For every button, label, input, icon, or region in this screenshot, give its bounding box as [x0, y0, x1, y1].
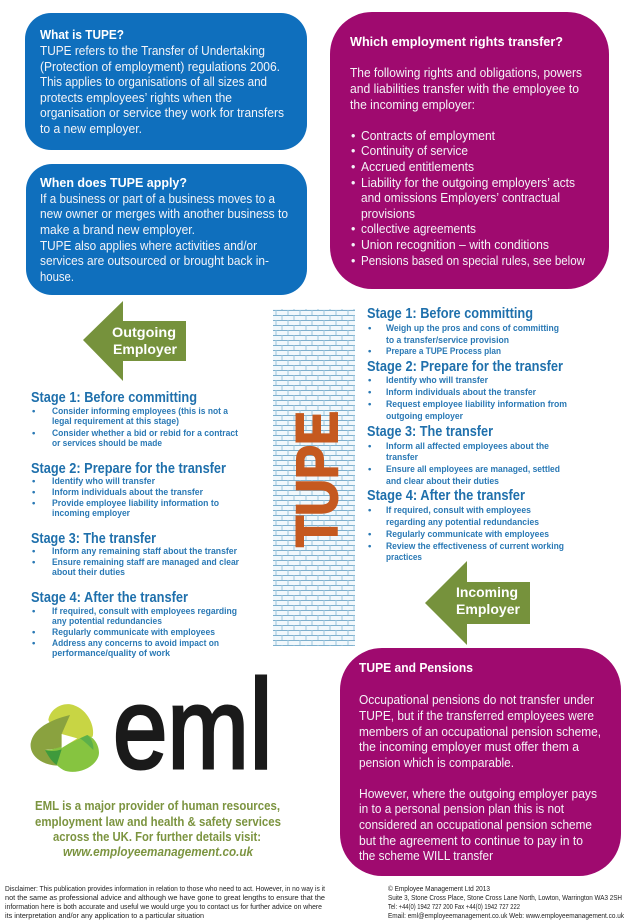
list: rights that transfer [351, 129, 586, 268]
text block: occupational pensions: members of an occupational pension scheme, [359, 725, 601, 739]
stage 4 outgoing: If required, consult with employees regarding [52, 606, 237, 617]
text block: contact details: Tel: +44(0) 1942 727 200 Fax +44(0) 1942 727 222 [388, 904, 520, 911]
text block: TUPE definition: (Protection of employment) regulations 2006. [40, 60, 280, 74]
stage 3 incoming: Ensure all employees are managed, settled [386, 464, 560, 475]
list: rights that transfer: Liability for the outgoing employers’ acts [361, 176, 575, 190]
list: rights that transfer: • [351, 222, 355, 236]
stage 4 incoming: If required, consult with employees [386, 505, 531, 516]
heading: what is TUPE: What is TUPE? [40, 28, 124, 42]
stage 1 outgoing [31, 389, 239, 449]
list: rights that transfer: • [351, 144, 355, 158]
stage 4 incoming: practices [386, 552, 422, 563]
stage 2 outgoing: incoming employer [52, 508, 130, 519]
stage 2 incoming: Stage 2: Prepare for the transfer [367, 358, 563, 375]
stage 3 outgoing: about their duties [52, 567, 125, 578]
stage 4 incoming: • [368, 529, 372, 540]
stage 3 incoming: Stage 3: The transfer [367, 423, 493, 440]
stage 1 outgoing: Stage 1: Before committing [31, 389, 197, 406]
text block: disclaimer: not the same as professional advice and although we have gone to great lengths to ensure that the [5, 895, 325, 902]
text block: rights intro [350, 66, 582, 112]
brick column with TUPE label [273, 309, 355, 646]
stage 1 outgoing: Consider informing employees (this is not a [52, 406, 229, 417]
list: rights that transfer: provisions [361, 207, 415, 221]
logo: eml [31, 653, 273, 795]
heading: when does TUPE apply: When does TUPE apply? [40, 176, 187, 190]
text block: disclaimer [5, 886, 325, 920]
text block: about EML [35, 799, 281, 859]
text block: rights intro: and liabilities transfer with the employee to [350, 82, 579, 96]
text block: rights intro: the incoming employer: [350, 98, 475, 112]
stage 1 outgoing: legal requirement at this stage) [52, 416, 179, 427]
text block: personal pension plans [359, 787, 597, 863]
text block: contact details: © Employee Management Ltd 2013 [388, 885, 490, 893]
heading: TUPE and pensions: TUPE and Pensions [359, 661, 473, 675]
stage 2 outgoing: Stage 2: Prepare for the transfer [31, 460, 226, 477]
text block: personal pension plans: considered an occupational pension scheme [359, 818, 592, 832]
list: rights that transfer: • [351, 238, 355, 252]
stage 3 outgoing [31, 530, 239, 578]
text block: occupational pensions: Occupational pensions do not transfer under [359, 693, 594, 707]
stage 4 incoming: • [368, 541, 372, 552]
stage 4 incoming: Regularly communicate with employees [386, 529, 549, 540]
panel: outgoing employer stages [31, 389, 239, 659]
stage 3 incoming: • [368, 441, 372, 452]
text block: when TUPE applies [40, 192, 288, 284]
stage 4 incoming: • [368, 505, 372, 516]
stage 1 incoming: • [368, 346, 372, 357]
text block: personal pension plans: the scheme WILL transfer [359, 849, 493, 863]
stage 1 outgoing: Consider whether a bid or rebid for a contract [52, 428, 239, 439]
list: rights that transfer: Contracts of employment [361, 129, 496, 143]
text block: TUPE definition: TUPE refers to the Transfer of Undertaking [40, 44, 265, 58]
text block: TUPE definition [40, 44, 284, 136]
stage 2 incoming: Request employee liability information from [386, 399, 567, 410]
stage 2 outgoing: Identify who will transfer [52, 476, 155, 487]
stage 4 outgoing [31, 589, 237, 659]
text block: occupational pensions [359, 693, 601, 770]
stage 2 outgoing: • [32, 487, 36, 498]
stage 2 incoming: • [368, 399, 372, 410]
stage 2 incoming: • [368, 375, 372, 386]
stage 1 outgoing: or services should be made [52, 438, 162, 449]
text block: rights intro: The following rights and obligations, powers [350, 66, 582, 80]
stage 2 incoming [367, 358, 567, 422]
stage 3 incoming: Inform all affected employees about the [386, 441, 549, 452]
stage 4 outgoing: performance/quality of work [52, 648, 171, 659]
text block: TUPE definition: This applies to organisations of all sizes and [40, 75, 267, 89]
stage 3 outgoing: Inform any remaining staff about the transfer [52, 546, 237, 557]
stage 4 outgoing: Regularly communicate with employees [52, 627, 215, 638]
text block: TUPE definition: organisation or service they work for transfers [40, 106, 284, 120]
text block: when TUPE applies: house. [40, 270, 74, 284]
stage 3 outgoing: Ensure remaining staff are managed and clear [52, 557, 239, 568]
text block: contact details: Email: eml@employeemanagement.co.uk Web: www.employeemanagement.co.uk [388, 913, 624, 920]
arrow: incoming employer: Employer [456, 602, 521, 617]
text block: about EML: across the UK. For further details visit: [53, 830, 261, 844]
panel: when does TUPE apply [26, 164, 307, 295]
stage 4 outgoing: any potential redundancies [52, 616, 162, 627]
text block: when TUPE applies: services are outsourced or brought back in- [40, 254, 269, 268]
stage 3 incoming: transfer [386, 452, 418, 463]
stage 1 outgoing: • [32, 406, 36, 417]
text block: occupational pensions: pension which is comparable. [359, 756, 514, 770]
stage 4 outgoing: Address any concerns to avoid impact on [52, 638, 219, 649]
stage 2 outgoing [31, 460, 226, 519]
stage 2 outgoing: Inform individuals about the transfer [52, 487, 203, 498]
panel: TUPE and pensions [340, 648, 621, 876]
stage 4 outgoing: • [32, 627, 36, 638]
text block: occupational pensions: the incoming employer must offer them a [359, 740, 579, 754]
panel: what is TUPE [25, 13, 307, 150]
stage 2 incoming: Inform individuals about the transfer [386, 387, 536, 398]
stage 3 incoming: and clear about their duties [386, 476, 499, 487]
stage 2 outgoing: • [32, 476, 36, 487]
stage 2 incoming: Identify who will transfer [386, 375, 488, 386]
text block: when TUPE applies: new owner or merges with another business to [40, 207, 288, 221]
stage 3 outgoing: • [32, 557, 36, 568]
arrow: outgoing employer: Employer [113, 342, 178, 357]
stage 1 incoming: • [368, 323, 372, 334]
text block: occupational pensions: TUPE, but if the transferred employees were [359, 709, 594, 723]
stage 2 outgoing: • [32, 498, 36, 509]
stage 4 incoming [367, 487, 564, 563]
stage 3 outgoing: Stage 3: The transfer [31, 530, 156, 547]
text block: TUPE definition: protects employees’ rights when the [40, 91, 232, 105]
icon: eml leaves [31, 704, 99, 772]
text block: personal pension plans: but the agreement to continue to pay in to [359, 834, 583, 848]
stage 3 outgoing: • [32, 546, 36, 557]
stage 1 incoming: Weigh up the pros and cons of committing [386, 323, 559, 334]
stage 4 outgoing: • [32, 606, 36, 617]
stage 1 incoming: Prepare a TUPE Process plan [386, 346, 501, 357]
text block: about EML: www.employeemanagement.co.uk [63, 845, 254, 859]
arrow: incoming employer [425, 561, 530, 645]
stage 1 outgoing: • [32, 428, 36, 439]
list: rights that transfer: • [351, 129, 355, 143]
text block: when TUPE applies: If a business or part of a business moves to a [40, 192, 275, 206]
list: rights that transfer: collective agreements [361, 222, 476, 236]
text block: personal pension plans: However, where the outgoing employer pays [359, 787, 597, 801]
text block: personal pension plans: in to a personal pension plan this is not [359, 802, 564, 816]
list: rights that transfer: Accrued entitlements [361, 160, 474, 174]
stage 4 incoming: Review the effectiveness of current working [386, 541, 564, 552]
logo: eml: eml [113, 653, 273, 795]
stage 2 incoming: outgoing employer [386, 411, 463, 422]
heading: which employment rights transfer: Which employment rights transfer? [350, 35, 563, 49]
stage 4 outgoing: Stage 4: After the transfer [31, 589, 188, 606]
stage 4 outgoing: • [32, 638, 36, 649]
text block: about EML: employment law and health & safety services [35, 815, 281, 829]
list: rights that transfer: Continuity of service [361, 144, 468, 158]
text block: TUPE definition: to a new employer. [40, 122, 142, 136]
text block: contact details [388, 885, 624, 920]
text block: disclaimer: Disclaimer: This publication provides information in relation to those who need to act. However, in no way is it [5, 886, 325, 893]
list: rights that transfer: • [351, 254, 355, 268]
arrow: outgoing employer: Outgoing [112, 325, 176, 340]
text block: about EML: EML is a major provider of human resources, [35, 799, 280, 813]
stage 1 incoming: to a transfer/service provision [386, 335, 509, 346]
stage 4 incoming: Stage 4: After the transfer [367, 487, 525, 504]
list: rights that transfer: Pensions based on special rules, see below [361, 254, 586, 268]
text block: when TUPE applies: make a brand new employer. [40, 223, 195, 237]
list: rights that transfer: and omissions Employers’ contractual [361, 191, 560, 205]
list: rights that transfer: Union recognition – with conditions [361, 238, 549, 252]
stage 4 incoming: regarding any potential redundancies [386, 517, 539, 528]
stage 3 incoming: • [368, 464, 372, 475]
text block: disclaimer: its interpretation and/or any application to a particular situation [5, 913, 204, 920]
stage 1 incoming [367, 305, 559, 357]
text block: disclaimer: information here is both accurate and useful we would urge you to contact us for further advice on where [5, 904, 322, 911]
stage 3 incoming [367, 423, 560, 487]
stage 2 incoming: • [368, 387, 372, 398]
list: rights that transfer: • [351, 176, 355, 190]
arrow: outgoing employer [83, 301, 186, 381]
panel: which employment rights transfer [330, 12, 609, 289]
list: rights that transfer: • [351, 160, 355, 174]
panel: incoming employer stages [367, 305, 567, 563]
arrow: incoming employer: Incoming [456, 585, 518, 600]
brick column with TUPE label: TUPE [285, 411, 350, 547]
stage 2 outgoing: Provide employee liability information to [52, 498, 219, 509]
text block: when TUPE applies: TUPE also applies where activities and/or [40, 239, 257, 253]
stage 1 incoming: Stage 1: Before committing [367, 305, 533, 322]
